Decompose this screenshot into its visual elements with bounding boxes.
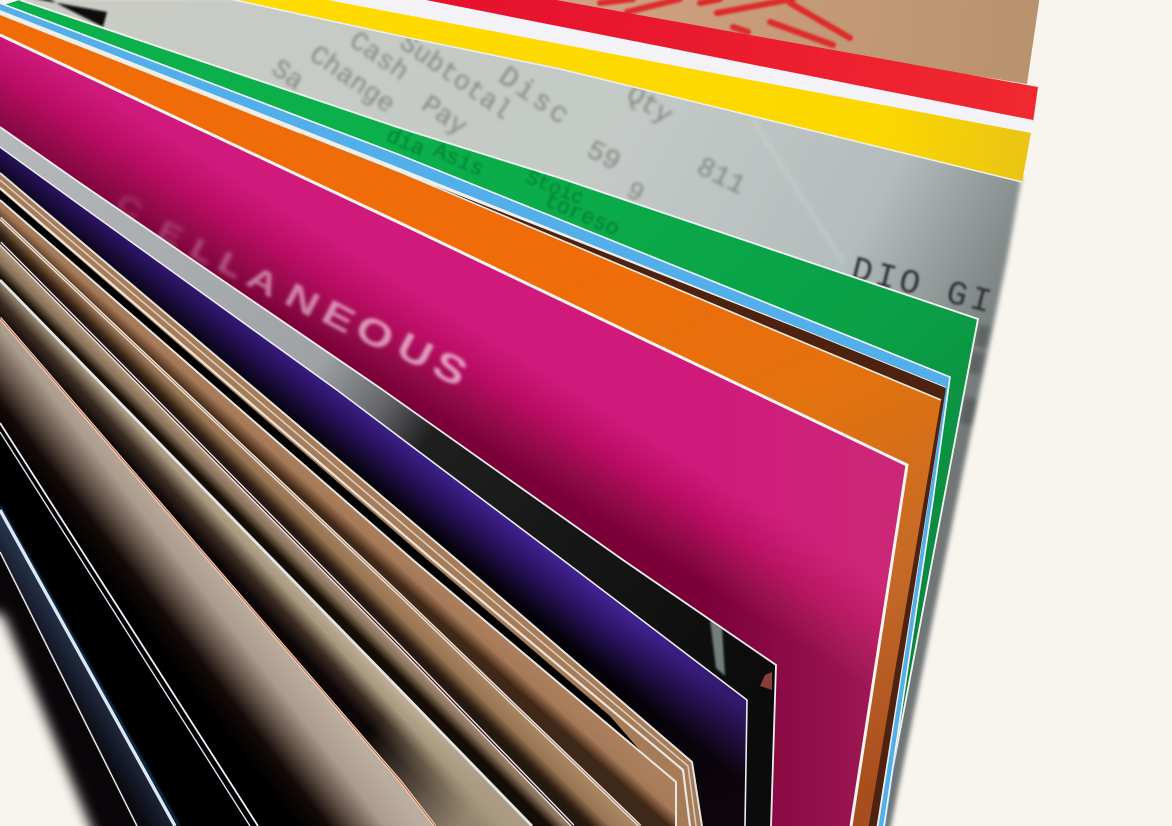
black gap behind tan sheet [0, 190, 650, 762]
heading: miscellaneous: L [212, 246, 249, 286]
page: green: dia [382, 124, 429, 163]
receipt text: Cash [343, 27, 413, 89]
blurred table edge [0, 606, 100, 826]
page: green: Asis [429, 139, 488, 183]
icon: black corner scrap [30, 0, 107, 27]
receipt blurred text [959, 324, 990, 425]
receipt large text: DIO GI [847, 252, 999, 324]
heading: miscellaneous: E [152, 214, 188, 253]
page: brown sliver [0, 10, 946, 826]
page: magenta [0, 35, 907, 826]
receipt text: Subtotal [393, 29, 516, 128]
page: green: toreso [540, 188, 623, 242]
heading: miscellaneous: C [111, 188, 148, 226]
page: tan cover with red pattern [540, 0, 1040, 84]
receipt text: Pay [415, 91, 472, 143]
heading: miscellaneous: E [316, 291, 362, 341]
heading: miscellaneous [111, 188, 475, 395]
heading: miscellaneous: U [390, 324, 440, 378]
page: taupe sheet fading to black [0, 318, 435, 826]
heading: miscellaneous: A [241, 259, 285, 305]
receipt text: 59 [581, 136, 625, 179]
page: black sheets [0, 423, 258, 826]
receipt text: Change [303, 41, 400, 121]
page: tan sheet two [0, 218, 640, 826]
receipt text: Disc [492, 60, 578, 134]
pages: thin tan sheets [0, 173, 702, 826]
heading: miscellaneous: L [185, 233, 220, 271]
page: beige sheet [0, 280, 532, 826]
page: purple [0, 147, 747, 826]
receipt text [265, 27, 750, 209]
heading: miscellaneous: S [426, 342, 475, 395]
heading: miscellaneous: N [279, 275, 326, 324]
heading: miscellaneous: O [348, 306, 401, 360]
page: tan sheet three [0, 243, 573, 826]
page: green: Stoic [522, 167, 587, 211]
page: large tan sheet [0, 200, 676, 826]
receipt text: Sa [265, 55, 309, 98]
page: orange [0, 14, 941, 826]
page: red [410, 0, 1038, 122]
receipt text: Qty [620, 80, 677, 132]
page: grey and black photo [0, 127, 776, 826]
page: white [320, 0, 1033, 134]
receipt text: 811 [691, 152, 750, 203]
page: yellow [230, 0, 1031, 182]
receipt text: 9 [621, 176, 649, 209]
